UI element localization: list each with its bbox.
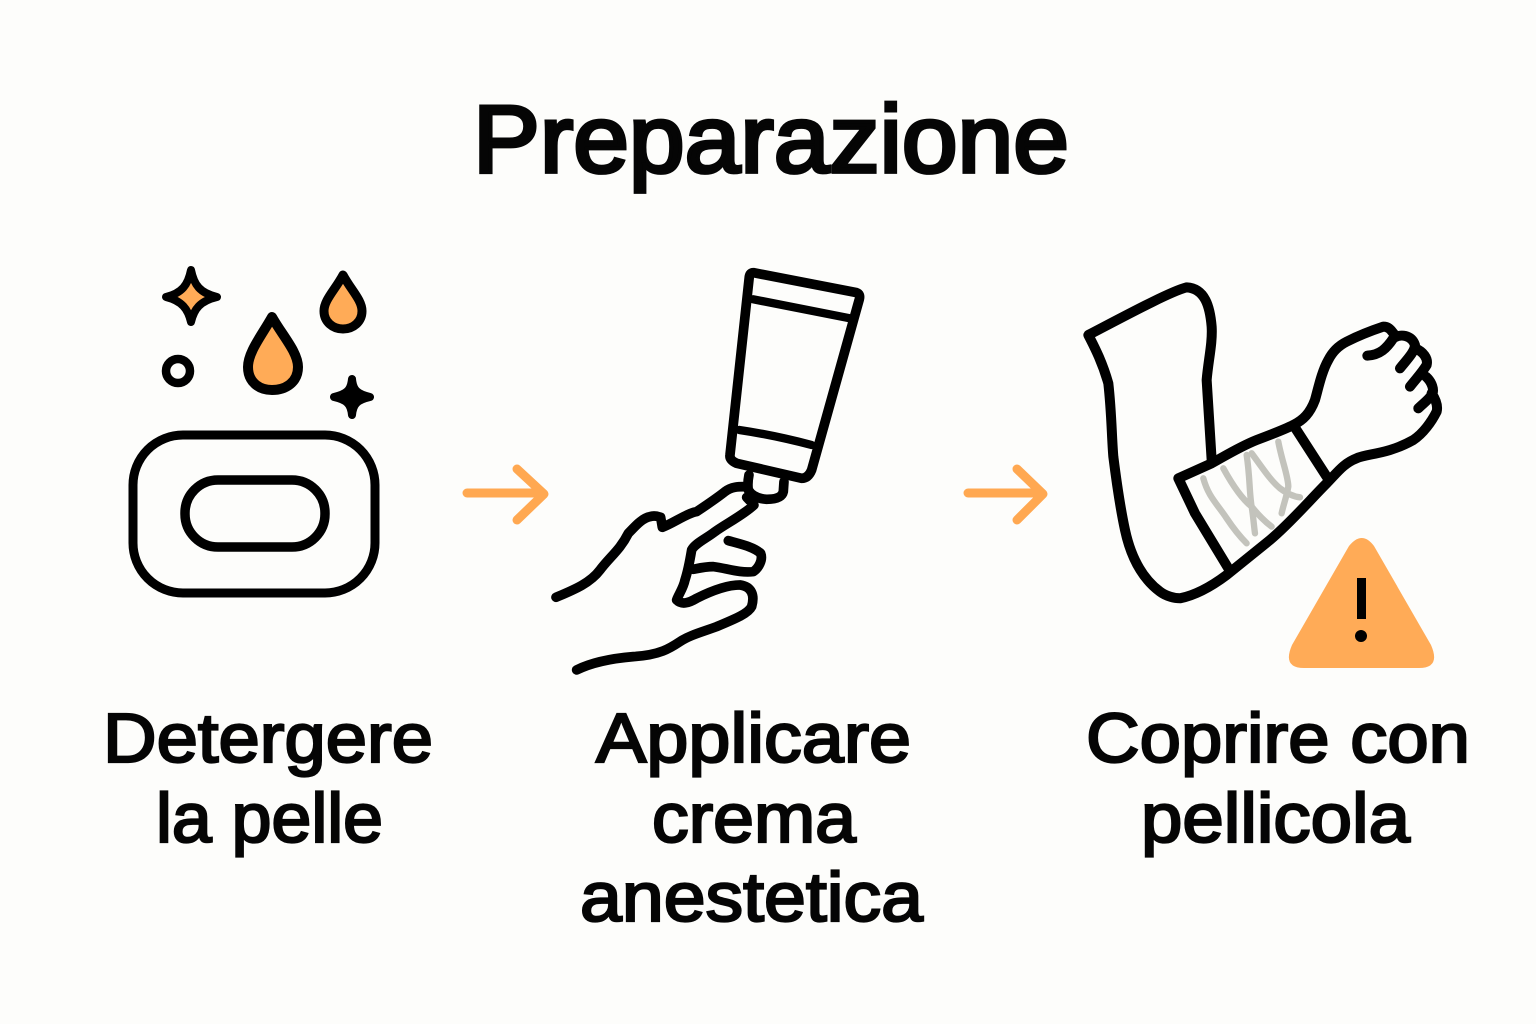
label: step 3: Coprire con [1086, 699, 1470, 777]
label: step 2 [580, 699, 923, 936]
film wrinkles [1203, 442, 1300, 543]
label: step 3: pellicola [1141, 779, 1410, 857]
exclamation mark [1357, 578, 1366, 619]
arrow: step 1 to step 2 [467, 469, 544, 520]
tube body [730, 273, 860, 478]
label: step 2: anestetica [580, 858, 923, 936]
arrow: step 2 to step 3 [968, 469, 1043, 520]
soap inset [185, 480, 325, 547]
small sparkle [334, 379, 370, 415]
icon: arm wrapped in film [1088, 287, 1437, 598]
bubble [166, 359, 190, 383]
title: Preparazione [473, 86, 1069, 193]
large sparkle [166, 270, 217, 322]
fist fingers [1367, 336, 1433, 408]
tube nozzle [748, 475, 784, 499]
small drop [324, 275, 362, 329]
film edge at wrist [1293, 425, 1327, 477]
icon: soap with water drops and sparkles [133, 270, 375, 593]
tube bands [739, 299, 850, 445]
label: step 2: Applicare [596, 699, 911, 777]
curled finger [693, 541, 761, 572]
exclamation dot [1355, 630, 1367, 642]
soap bar [133, 435, 375, 593]
label: step 1: la pelle [156, 779, 383, 857]
icon: warning triangle [1289, 538, 1434, 668]
label: step 3 [1086, 699, 1470, 857]
label: step 1: Detergere [103, 699, 433, 777]
film band and forearm top [1178, 327, 1395, 568]
index finger and palm contour [577, 497, 754, 670]
large drop [248, 317, 298, 390]
label: step 2: crema [652, 779, 856, 857]
label: step 1 [103, 699, 433, 857]
hand upper contour [556, 487, 745, 597]
upper arm [1088, 287, 1437, 598]
icon: cream tube and hand [556, 273, 860, 670]
